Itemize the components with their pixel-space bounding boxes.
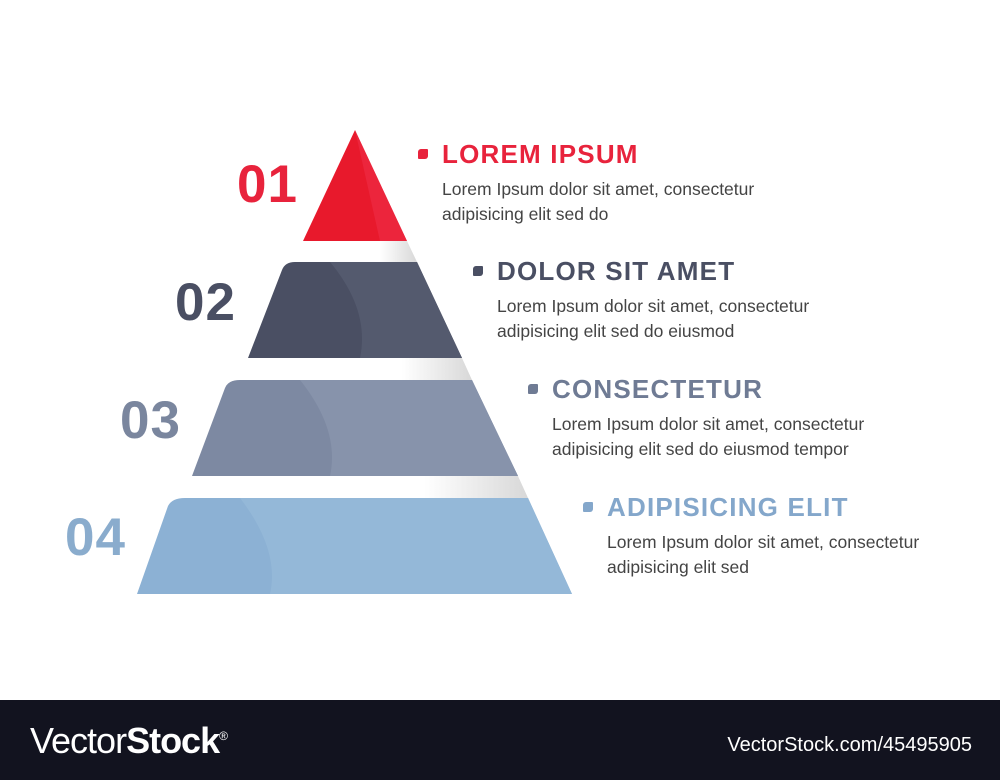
tier 2 [248,262,462,358]
text block 1: adipisicing elit sed do [442,204,608,224]
text block 1: LOREM IPSUM [442,139,639,169]
text block 4: adipisicing elit sed [607,557,749,577]
number 03: 03 [120,391,181,450]
text block 4 [583,492,919,577]
text block 2: DOLOR SIT AMET [497,256,735,286]
text block 3: adipisicing elit sed do eiusmod tempor [552,439,849,459]
text block 3: Lorem Ipsum dolor sit amet, consectetur [552,414,864,434]
gap shadows [182,241,528,498]
text block 2: adipisicing elit sed do eiusmod [497,321,734,341]
number 04: 04 [65,508,126,567]
text block 2 [473,256,809,341]
footer logo: VectorStock® [30,720,227,761]
footer url: VectorStock.com/45495905 [727,734,972,756]
text block 3 [528,374,864,459]
number 01: 01 [237,155,298,214]
text block 3: CONSECTETUR [552,374,763,404]
text block 4: ADIPISICING ELIT [607,492,849,522]
text block 4: Lorem Ipsum dolor sit amet, consectetur [607,532,919,552]
tier 1 [303,130,407,241]
number 02: 02 [175,273,236,332]
text block 1 [418,139,754,224]
text block 2: Lorem Ipsum dolor sit amet, consectetur [497,296,809,316]
footer bar [0,700,1000,780]
text block 1: Lorem Ipsum dolor sit amet, consectetur [442,179,754,199]
tier 4 [137,498,572,594]
tier 3 [192,380,518,476]
